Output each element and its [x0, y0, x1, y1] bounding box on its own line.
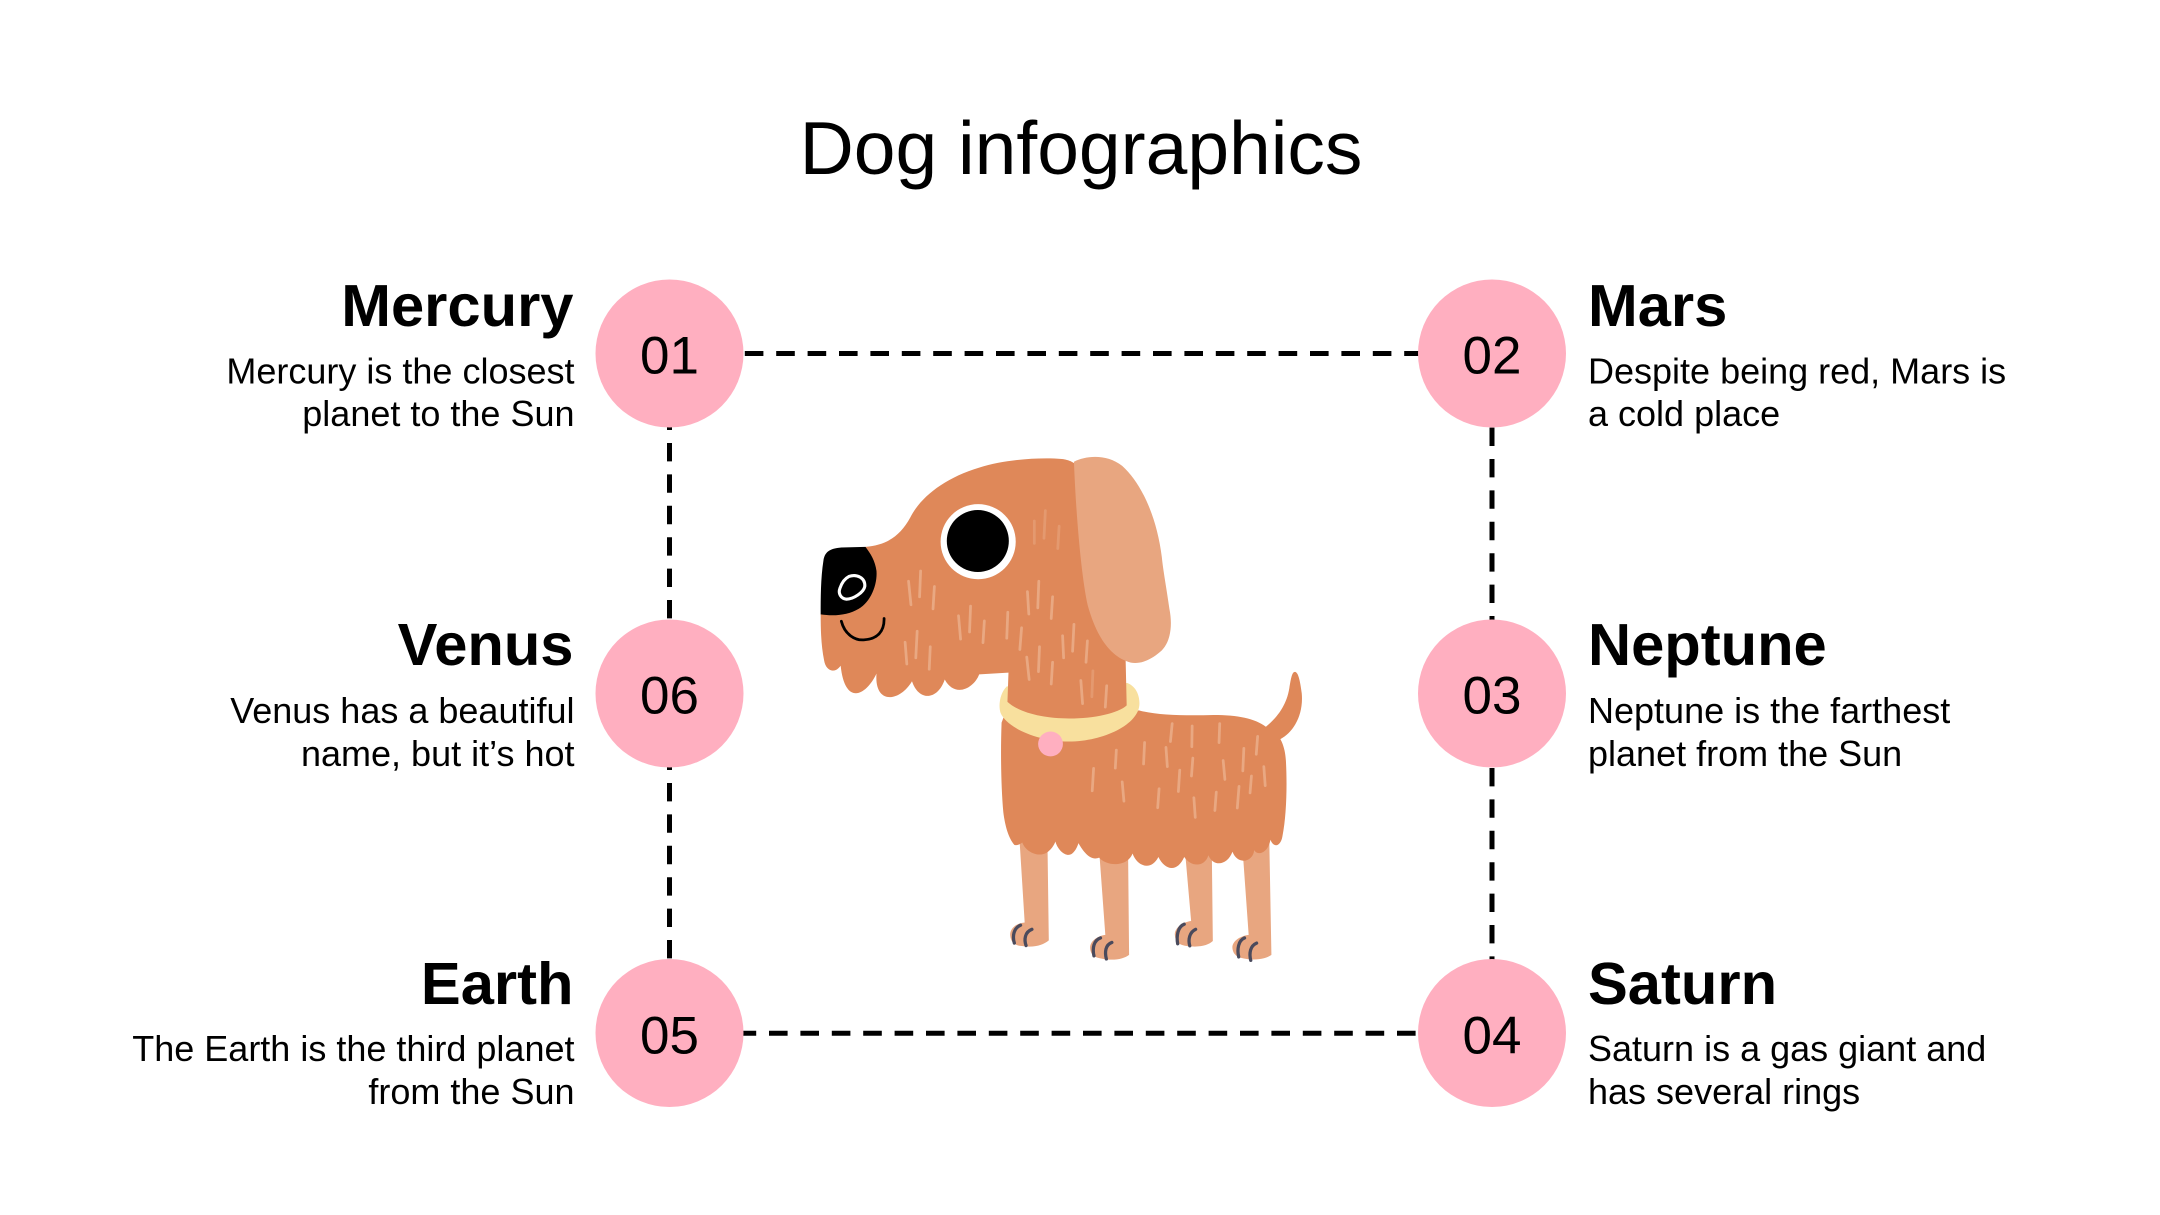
dog claws	[1013, 924, 1257, 960]
step 04: Saturn: 04	[1463, 1006, 1521, 1066]
step 02: Mars: Mars	[1588, 272, 1727, 339]
step 01: Mercury	[226, 272, 744, 434]
step 03: Neptune: 03	[1463, 666, 1521, 726]
dog smile	[841, 619, 884, 640]
step 02: Mars: Despite being red, Mars is	[1588, 350, 2006, 392]
step 05: Earth	[132, 950, 744, 1112]
step 04: Saturn: Saturn	[1588, 950, 1777, 1017]
step 04: Saturn: Saturn is a gas giant and	[1588, 1028, 1986, 1069]
step 02: Mars: a cold place	[1588, 393, 1780, 434]
dog legs	[1010, 840, 1271, 960]
step 01: Mercury: Mercury is the closest	[226, 350, 574, 392]
dashed connector frame	[670, 354, 1492, 1033]
dog ear	[1074, 457, 1171, 663]
dog eye	[941, 504, 1016, 579]
step 05: Earth: from the Sun	[368, 1071, 574, 1112]
step 03: Neptune: planet from the Sun	[1588, 733, 1902, 774]
step 01: Mercury: Mercury	[341, 272, 574, 339]
dog collar tag	[1038, 732, 1063, 756]
dog head and neck	[821, 458, 1127, 718]
step 06: Venus	[230, 611, 744, 774]
step 02: Mars	[1418, 272, 2006, 434]
title: Dog infographics	[800, 106, 1362, 190]
dog nose	[821, 547, 877, 615]
step 04: Saturn	[1418, 950, 1986, 1112]
dog collar	[1000, 683, 1139, 742]
step 06: Venus: Venus has a beautiful	[230, 690, 574, 731]
step 03: Neptune: Neptune	[1588, 611, 1827, 678]
step 04: Saturn: has several rings	[1588, 1071, 1860, 1112]
icon: dog illustration	[821, 457, 1302, 960]
step 06: Venus: name, but it’s hot	[301, 733, 574, 774]
dog tail and body	[1001, 672, 1302, 868]
step 01: Mercury: planet to the Sun	[302, 393, 574, 434]
step 05: Earth: Earth	[421, 950, 574, 1017]
dog fur marks	[905, 511, 1265, 817]
step 05: Earth: The Earth is the third planet	[132, 1028, 574, 1069]
step 06: Venus: 06	[640, 666, 699, 726]
step 05: Earth: 05	[640, 1006, 699, 1066]
step 02: Mars: 02	[1463, 326, 1521, 386]
step 03: Neptune: Neptune is the farthest	[1588, 690, 1950, 731]
step 06: Venus: Venus	[398, 611, 574, 678]
step 03: Neptune	[1418, 611, 1950, 774]
step 01: Mercury: 01	[640, 326, 699, 386]
